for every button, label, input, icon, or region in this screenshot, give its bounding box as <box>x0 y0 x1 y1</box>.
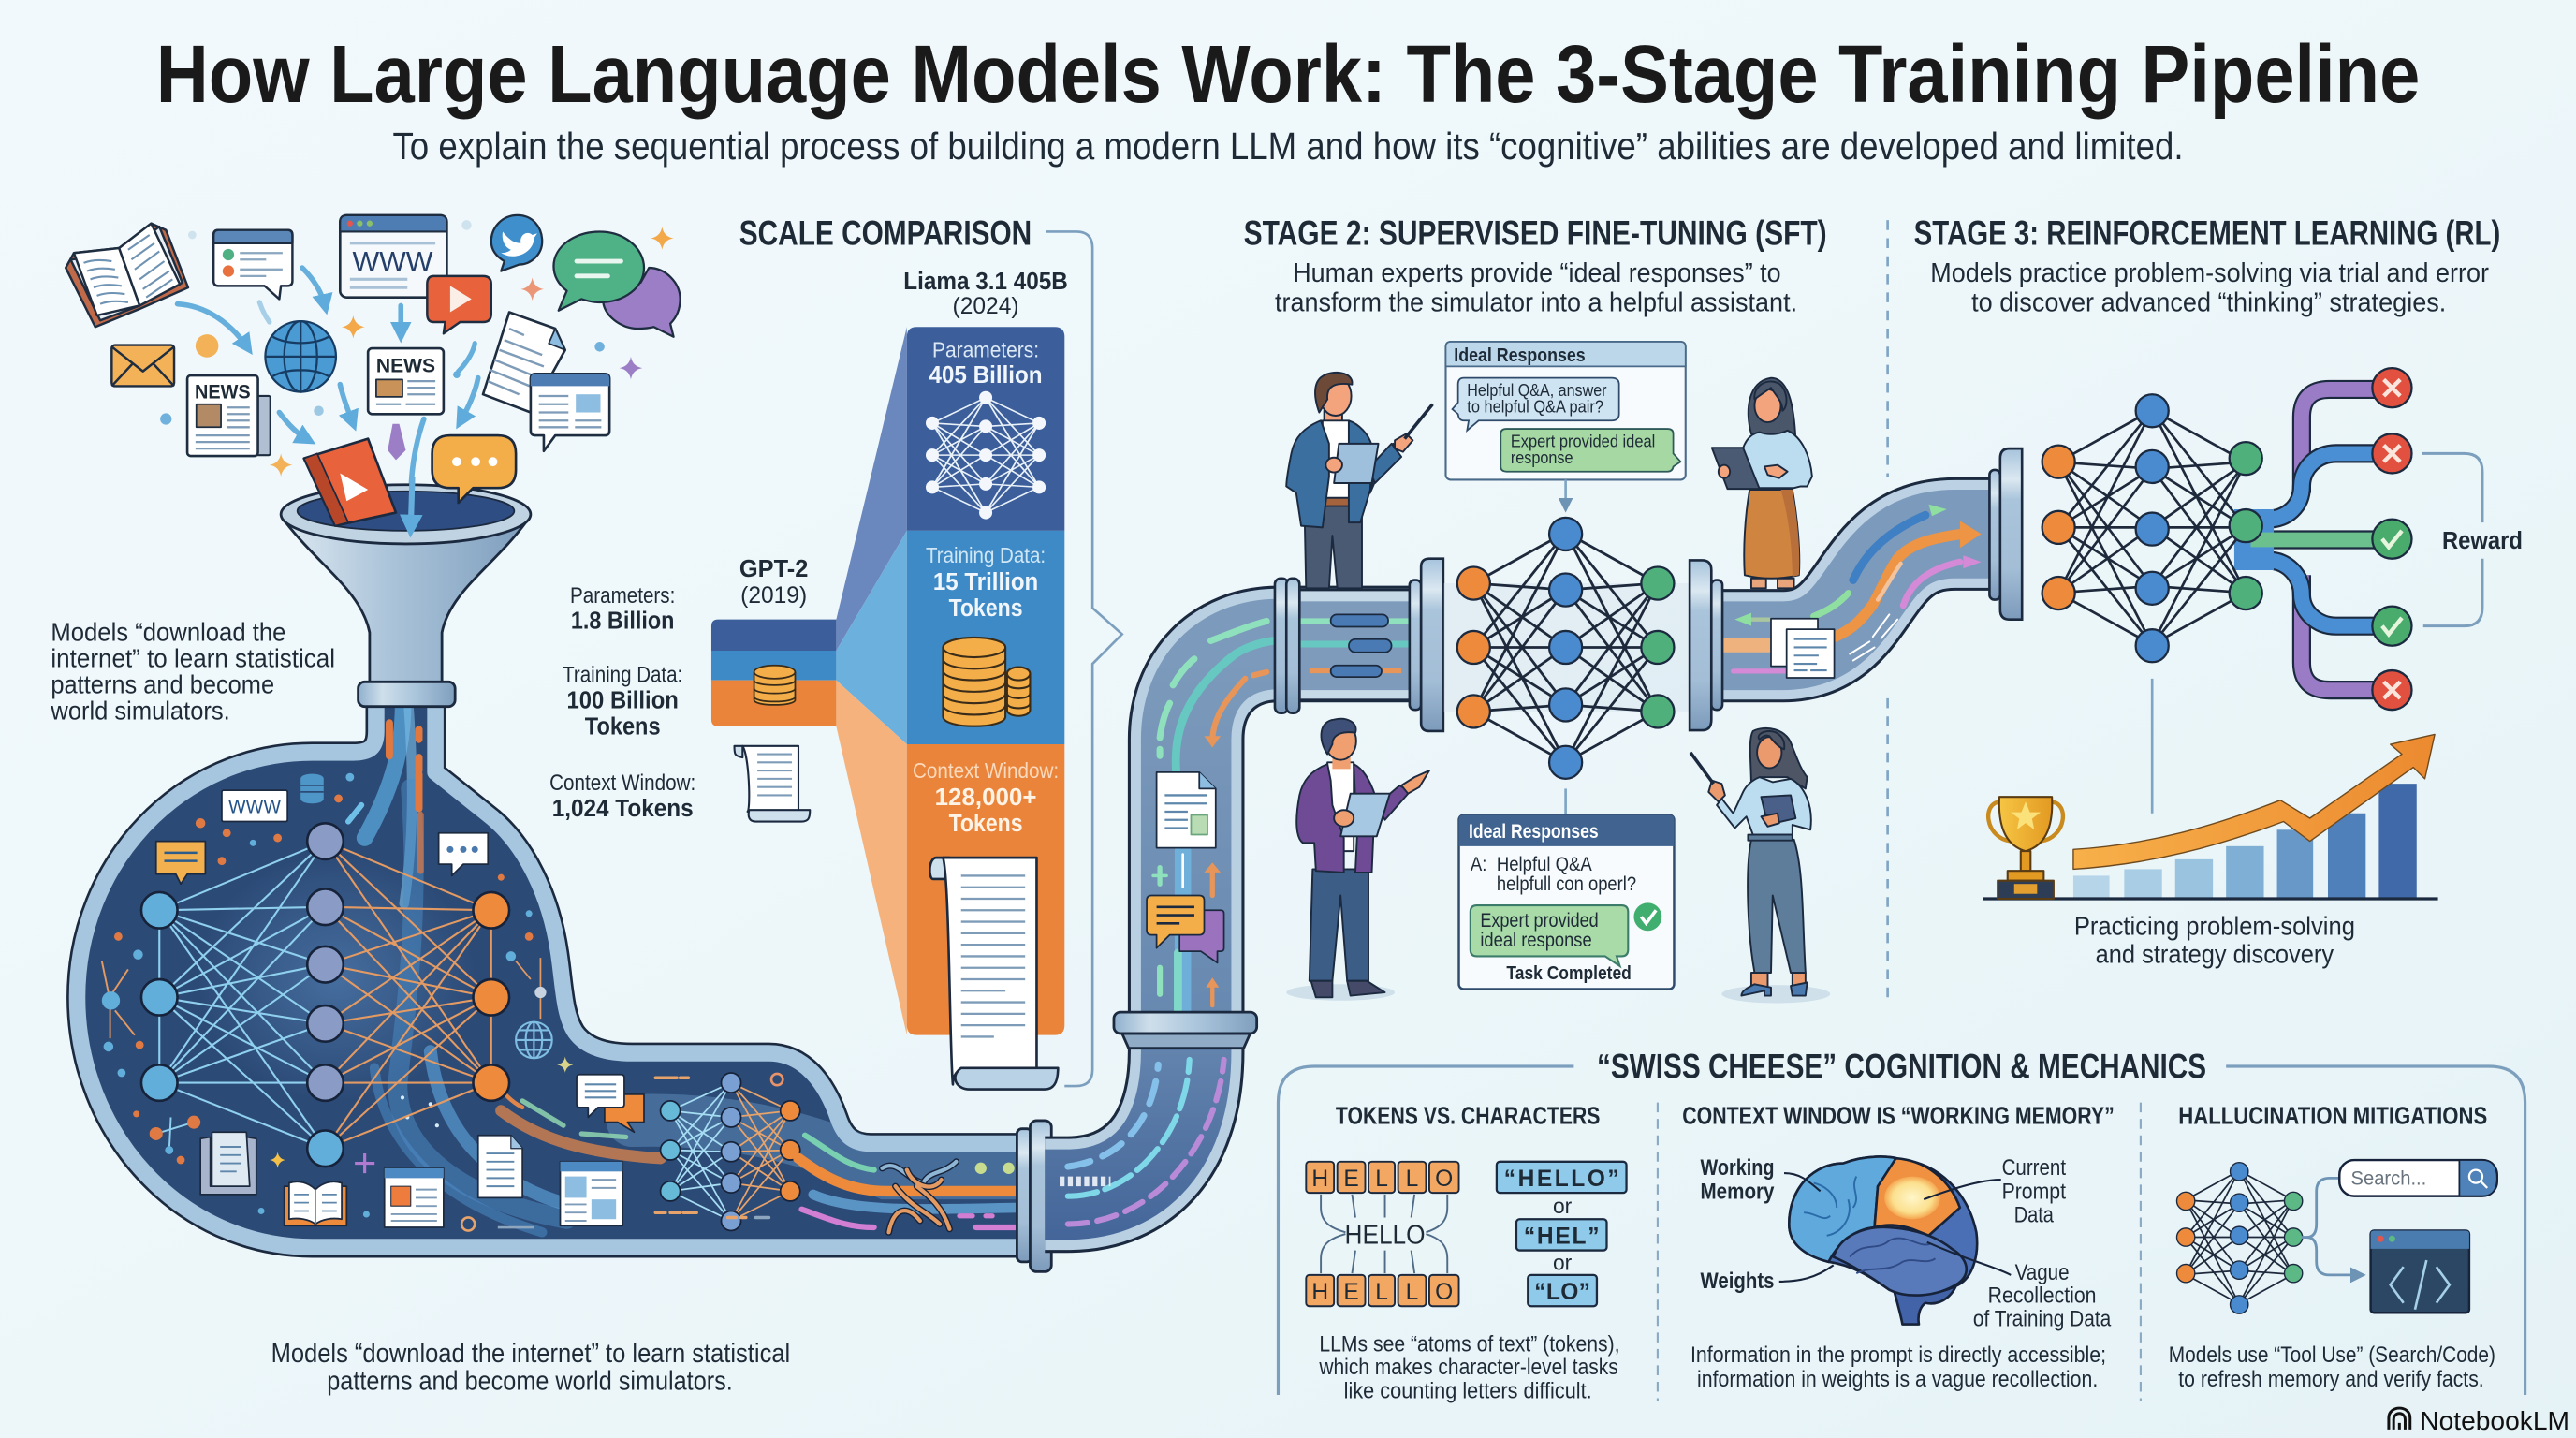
ideal responses card (bottom): Helpful Q&A <box>1497 854 1592 875</box>
icon: small browser card <box>213 230 292 299</box>
icon: www browser <box>340 215 446 298</box>
funnel <box>281 435 531 707</box>
Llama column: Tokens <box>949 809 1023 837</box>
arrow line: network to lower card <box>1565 788 1567 814</box>
GPT-2 labels: Parameters: <box>570 584 675 609</box>
pipe streams <box>1060 621 1273 1224</box>
stage 3: output branches <box>2234 389 2382 690</box>
column: tokens vs characters: E <box>1343 1167 1359 1192</box>
pipe flange stage 1 <box>1017 1121 1051 1271</box>
decorative sparkles <box>160 220 674 477</box>
column caption: like counting letters difficult. <box>1344 1380 1592 1404</box>
column caption: which makes character-level tasks <box>1318 1356 1618 1380</box>
icon: globe <box>265 321 336 392</box>
icon: red video file entering funnel <box>304 439 396 526</box>
stage 1 side text <box>51 617 335 726</box>
stage 3 caption: Practicing problem-solving <box>2074 912 2355 941</box>
pipe chat bubbles icon <box>1147 895 1224 962</box>
icon: news card centre <box>368 348 444 414</box>
icon: news card left: NEWS <box>195 382 251 404</box>
Llama column: 405 Billion <box>929 362 1043 389</box>
column: tokens vs characters: L <box>1406 1167 1418 1192</box>
GPT-2 labels: Training Data: <box>563 663 682 687</box>
stage 1 bottom caption: patterns and become world simulators. <box>327 1367 733 1397</box>
icon: news card centre: NEWS <box>376 356 435 377</box>
column: context window: Weights <box>1701 1269 1775 1294</box>
column: tokens vs characters: H <box>1311 1167 1328 1192</box>
search box <box>2339 1160 2497 1196</box>
reward bracket and label <box>2422 453 2523 626</box>
panel: swiss cheese cognition <box>1278 1047 2525 1404</box>
column: context window: Memory <box>1701 1180 1775 1204</box>
stage 3 heading: to discover advanced “thinking” strategies. <box>1971 288 2446 318</box>
Llama column <box>907 327 1064 1090</box>
stage 1 side text: Models “download the <box>51 617 285 646</box>
bar chart: strategy improvement <box>1983 784 2438 899</box>
icon: green speech bubble <box>553 231 644 311</box>
column: tokens vs characters: L <box>1375 1280 1388 1305</box>
person: man in blue suit with tablet <box>1286 373 1432 588</box>
ideal responses card (top): Helpful Q&A, answer <box>1467 380 1606 400</box>
icon: news card left <box>187 375 271 456</box>
flask body outline <box>77 690 1027 1247</box>
flask inner fill <box>77 690 1027 1247</box>
NotebookLM logo: NotebookLM <box>2420 1406 2569 1435</box>
stage 3 neural network <box>2042 394 2262 662</box>
funnel rim <box>281 485 531 544</box>
column: tokens vs characters: L <box>1406 1280 1418 1305</box>
column caption <box>1690 1343 2106 1392</box>
stage 2 neural network <box>1457 518 1674 779</box>
rising arrow <box>2073 734 2435 869</box>
stage 3 flange <box>1989 448 2022 620</box>
stage 3 caption <box>2074 912 2355 968</box>
column: tokens vs characters: HELLO <box>1345 1221 1426 1251</box>
ideal responses card (bottom) <box>1459 814 1674 990</box>
stage 1 side text: world simulators. <box>51 697 230 726</box>
icon: coin stack small <box>754 666 795 705</box>
ideal responses card (bottom): Task Completed <box>1506 963 1632 984</box>
icon: yellow chat bubble <box>432 435 516 503</box>
ideal responses card (top) <box>1445 342 1686 479</box>
ideal responses card (top): Ideal Responses <box>1454 345 1586 366</box>
stage 2 heading: Human experts provide “ideal responses” to <box>1293 258 1781 288</box>
search box: Search... <box>2351 1167 2426 1189</box>
ideal responses card (top): to helpful Q&A pair? <box>1467 397 1603 417</box>
ideal responses card (bottom): Expert provided <box>1480 910 1599 932</box>
ideal responses card (bottom): helpfull con operl? <box>1497 873 1636 895</box>
column caption: Information in the prompt is directly accessible; <box>1690 1343 2106 1368</box>
stage 2 heading: transform the simulator into a helpful assistant. <box>1275 288 1797 318</box>
stage 3 heading: Models practice problem-solving via trial and error <box>1930 258 2489 288</box>
pale band behind stage 2 network <box>1444 583 1689 712</box>
icon: browser card right <box>531 374 609 451</box>
icon: www browser: WWW <box>352 247 433 278</box>
ideal responses card (bottom): ideal response <box>1480 930 1592 951</box>
column caption <box>2169 1343 2496 1392</box>
column: hallucination mitigations <box>2169 1103 2497 1392</box>
column: context window: Prompt <box>2002 1180 2066 1204</box>
flask icons: www, bubbles, documents <box>102 773 644 1231</box>
column: tokens vs characters: or <box>1553 1194 1573 1218</box>
column: context window: Data <box>2014 1204 2055 1228</box>
brain labels <box>1779 1173 2011 1282</box>
column: context window <box>1682 1103 2115 1392</box>
column: tokens vs characters: H <box>1311 1280 1328 1305</box>
panel frame <box>1278 1066 2525 1395</box>
icon: white neural network <box>926 391 1046 520</box>
Llama column: Training Data: <box>926 543 1046 567</box>
GPT-2 labels: GPT-2 <box>739 556 808 582</box>
stage 2 heading <box>1244 213 1827 318</box>
person: woman with pointer <box>1690 728 1830 1003</box>
Llama label: (2024) <box>953 294 1019 319</box>
column caption: Models use “Tool Use” (Search/Code) <box>2169 1343 2496 1368</box>
small neural network <box>2177 1163 2303 1313</box>
GPT-2 labels <box>549 556 808 822</box>
column: tokens vs characters: “LO” <box>1534 1280 1590 1305</box>
icon: small scroll <box>735 746 810 822</box>
stage 1 side text: internet” to learn statistical <box>51 644 335 673</box>
panel heading: “SWISS CHEESE” COGNITION & MECHANICS <box>1597 1047 2206 1085</box>
reward bracket and label: Reward <box>2442 526 2523 554</box>
Llama column: 15 Trillion <box>933 567 1038 595</box>
stage 3 outcomes: cross and check markers <box>2372 368 2411 710</box>
stage 2 right flange <box>1690 560 1722 730</box>
column: context window: Vague <box>2015 1261 2070 1285</box>
icon: long scroll <box>929 858 1058 1090</box>
arrow: top card to network <box>1565 479 1567 507</box>
Llama label <box>903 267 1068 319</box>
GPT-2 labels: (2019) <box>740 583 807 609</box>
person: man in purple blazer <box>1286 719 1429 1001</box>
stage 3 heading <box>1914 213 2500 318</box>
hello letter tokens <box>1306 1162 1459 1306</box>
column: context window: CONTEXT WINDOW IS “WORKING MEMORY” <box>1682 1103 2115 1129</box>
icon: tilted document <box>483 312 565 413</box>
column caption: LLMs see “atoms of text” (tokens), <box>1319 1333 1620 1357</box>
GPT-2 labels: 1,024 Tokens <box>552 794 694 822</box>
column: tokens vs characters: “HELLO” <box>1504 1167 1619 1192</box>
icon: purple speech bubble <box>603 268 681 337</box>
bracket <box>1046 231 1122 1086</box>
stage 1 flask: neural network bulb and pipe <box>77 690 1051 1271</box>
icon: trophy <box>1988 797 2063 899</box>
stage 2 heading: STAGE 2: SUPERVISED FINE-TUNING (SFT) <box>1244 213 1827 252</box>
small neural network in pipe <box>661 1073 800 1231</box>
icon: stacked documents in pipe <box>1771 619 1835 678</box>
funnel collar <box>359 682 455 707</box>
stage 2: pipe couplings <box>1275 559 1443 731</box>
column caption: information in weights is a vague recollection. <box>1697 1368 2098 1392</box>
column: tokens vs characters: “HEL” <box>1524 1225 1600 1250</box>
ideal responses card (top): response <box>1511 448 1573 467</box>
stage 1: internet content icons <box>66 215 681 501</box>
column: tokens vs characters: L <box>1375 1167 1388 1192</box>
connector to progress chart <box>2151 679 2153 814</box>
column: tokens vs characters: E <box>1343 1280 1359 1305</box>
central pipe: stage 1 to stage 2 <box>1045 621 1412 1224</box>
code window <box>2371 1231 2469 1313</box>
icon: red video bubble <box>427 276 491 333</box>
icon: open book <box>66 224 188 327</box>
GPT-2 bar <box>711 620 836 726</box>
GPT-2 labels: Tokens <box>585 712 661 740</box>
column: hallucination mitigations: HALLUCINATION MITIGATIONS <box>2178 1103 2487 1129</box>
column: context window: of Training Data <box>1973 1307 2112 1331</box>
Llama column: Parameters: <box>932 338 1039 362</box>
person: woman with tablet and orange skirt <box>1712 378 1812 588</box>
S-pipe streams <box>1721 505 1982 671</box>
stage 1 side text: patterns and become <box>51 670 274 699</box>
column caption: to refresh memory and verify facts. <box>2178 1368 2484 1392</box>
stage 1 bottom caption <box>271 1339 790 1397</box>
stage 1 bottom caption: Models “download the internet” to learn statistical <box>271 1339 790 1369</box>
GPT-2 labels: 100 Billion <box>567 685 679 713</box>
icon: envelope <box>111 345 174 386</box>
funnel inlet arrow <box>411 477 413 529</box>
ideal responses card (bottom): A: <box>1471 854 1486 875</box>
GPT-2 labels: 1.8 Billion <box>571 606 674 634</box>
column: tokens vs characters: TOKENS VS. CHARACTERS <box>1336 1103 1600 1129</box>
pipe document icon <box>1157 772 1216 848</box>
column: context window: Working <box>1701 1156 1775 1181</box>
flask icons: www, bubbles, documents: WWW <box>228 797 281 818</box>
column: context window: Current <box>2002 1156 2066 1181</box>
blue token chunks <box>1497 1162 1627 1306</box>
lower vertical flange <box>1114 1012 1257 1049</box>
tool connectors <box>2302 1178 2361 1275</box>
column: tokens vs characters <box>1306 1103 1627 1404</box>
Llama column: 128,000+ <box>935 783 1036 811</box>
flask rim band <box>77 690 1027 1247</box>
Llama label: Liama 3.1 405B <box>903 267 1068 295</box>
GPT-2 labels: Context Window: <box>549 771 695 796</box>
column: tokens vs characters: O <box>1435 1280 1453 1305</box>
data stream swirl <box>198 690 1027 1232</box>
connecting wedges <box>836 327 907 1035</box>
flask neural network <box>141 823 509 1167</box>
Llama column: Tokens <box>949 594 1023 622</box>
funnel cone <box>285 522 526 687</box>
icon: brain <box>1789 1156 1977 1325</box>
pipe data streams and tangled knot <box>655 1074 1018 1232</box>
column: context window: Recollection <box>1988 1284 2097 1309</box>
stage 2 to stage 3 S-shaped pipe <box>1708 505 1996 671</box>
ideal responses card (top): Expert provided ideal <box>1511 431 1655 450</box>
icon: coin stacks <box>943 638 1030 726</box>
column: tokens vs characters: or <box>1553 1251 1573 1275</box>
panel: scale comparison <box>549 213 1122 1090</box>
heading: scale comparison: SCALE COMPARISON <box>739 213 1032 252</box>
icon: twitter bubble <box>491 215 542 271</box>
falling arrows <box>178 268 478 501</box>
column caption <box>1318 1333 1620 1404</box>
Llama column: Context Window: <box>913 758 1059 783</box>
stage 3 caption: and strategy discovery <box>2096 939 2334 968</box>
ideal responses card (bottom): Ideal Responses <box>1469 821 1599 843</box>
subtitle: To explain the sequential process of building a modern LLM and how its “cognitive” abilities are developed and limited. <box>392 125 2184 168</box>
column: tokens vs characters: O <box>1435 1167 1453 1192</box>
